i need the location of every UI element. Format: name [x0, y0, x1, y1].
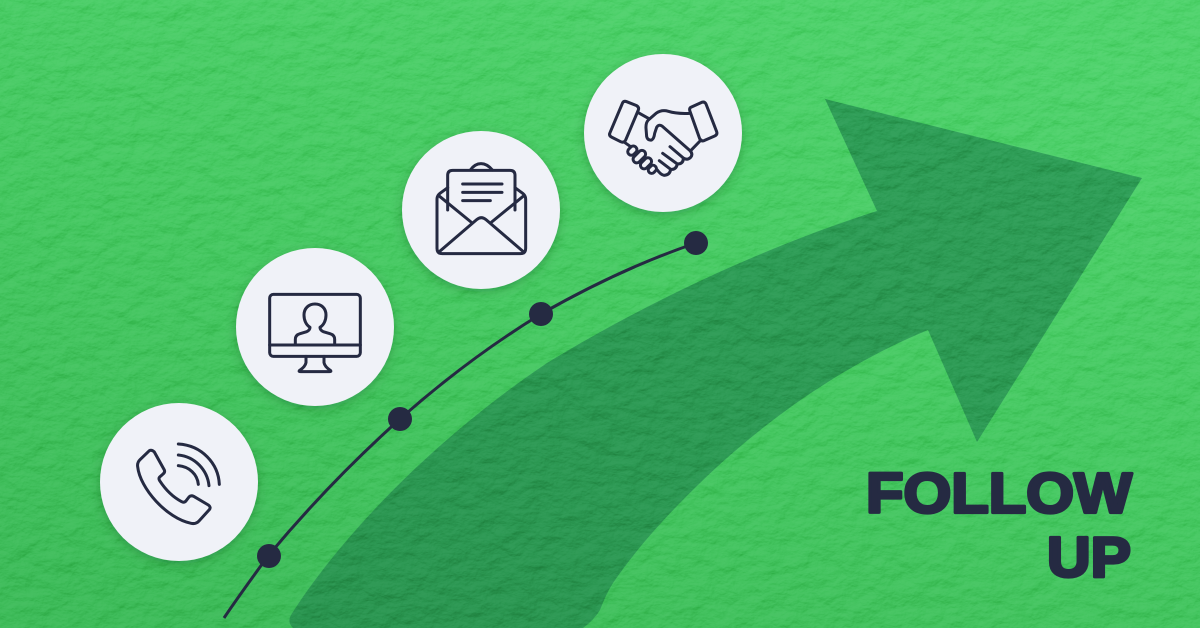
icon: phone handset with signal [138, 444, 219, 524]
milestone dot 3 [529, 302, 553, 326]
timeline curve with milestones [224, 231, 708, 618]
large upward arrow [289, 99, 1142, 628]
badge circle [236, 248, 394, 406]
title line 1: FOLLOW [866, 462, 1132, 526]
icon: handshake [610, 101, 717, 175]
icon: open envelope with letter [437, 164, 526, 254]
milestone dot 2 [388, 407, 412, 431]
icon: monitor with person [270, 294, 360, 372]
milestone dot 4 [684, 231, 708, 255]
title: FOLLOW UP [866, 462, 1132, 590]
badge circle [100, 403, 258, 561]
badge: email [402, 131, 560, 289]
milestone dot 1 [257, 544, 281, 568]
badge: phone call [100, 403, 258, 561]
badge: video call [236, 248, 394, 406]
badge: handshake [584, 54, 742, 212]
badge circle [402, 131, 560, 289]
title line 2: UP [1047, 526, 1131, 590]
badge circle [584, 54, 742, 212]
curve line [224, 243, 696, 618]
